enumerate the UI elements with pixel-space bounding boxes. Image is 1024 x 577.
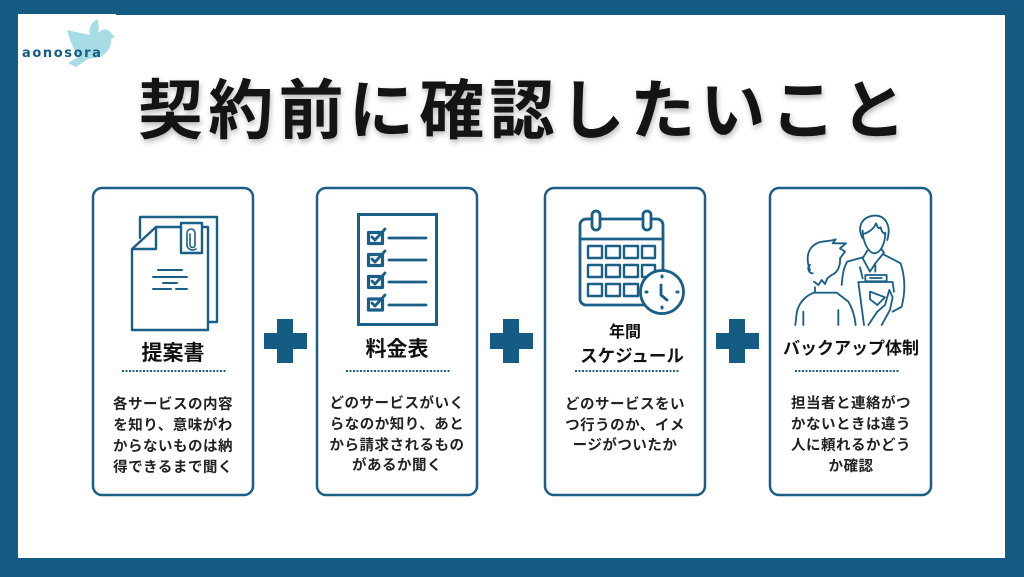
panel: 提案書 [93,188,253,495]
text: 年間スケジュール description: ージがついたか [573,436,677,454]
text: バックアップ体制 description: か確認 [828,458,874,475]
icon: checklist [358,214,436,324]
text: 料金表 description: があるか聞く [352,456,442,474]
logo: aonosora: aonosora [22,46,103,61]
text: 提案書 description: を知り、意味がわ [113,416,233,434]
heading: 年間スケジュール: スケジュール [580,346,684,366]
text: バックアップ体制 description [791,394,911,475]
heading: 年間スケジュール: 年間 [609,322,641,341]
plus 3 [716,319,759,363]
panel: 年間スケジュール [545,188,705,495]
icon: two people consulting [795,216,904,325]
icon: calendar with clock [580,211,684,314]
heading: バックアップ体制: バックアップ体制 [783,339,919,358]
text: 年間スケジュール description [565,395,685,454]
text: 料金表 description: らなのか知り、あと [330,416,464,433]
text: 年間スケジュール description: どのサービスをい [565,395,685,413]
text: 提案書 description: 各サービスの内容 [113,395,233,413]
panel: 料金表 [317,188,477,495]
plus 1 [264,319,307,363]
text: 提案書 description [113,395,233,476]
text: 提案書 description: からないものは納 [113,438,233,455]
logo: aonosora [22,19,115,67]
heading: 料金表: 料金表 [366,338,428,361]
text: 料金表 description: どのサービスがいく [330,394,464,412]
heading: 年間スケジュール [580,322,684,366]
text: 料金表 description: から請求されるもの [330,436,464,454]
panel: バックアップ体制 [770,188,931,495]
text: バックアップ体制 description: 担当者と連絡がつ [791,394,911,412]
text: 料金表 description [330,394,464,474]
title: 契約前に確認したいこと [138,74,911,147]
icon: documents with paperclip [132,217,217,330]
text: バックアップ体制 description: かないときは違う [791,415,911,433]
text: バックアップ体制 description: 人に頼れるかどう [791,436,911,454]
heading: 提案書: 提案書 [142,342,204,365]
text: 提案書 description: 得できるまで聞く [113,459,233,476]
plus 2 [490,319,533,363]
text: 年間スケジュール description: つ行うのか、イメ [565,417,685,434]
